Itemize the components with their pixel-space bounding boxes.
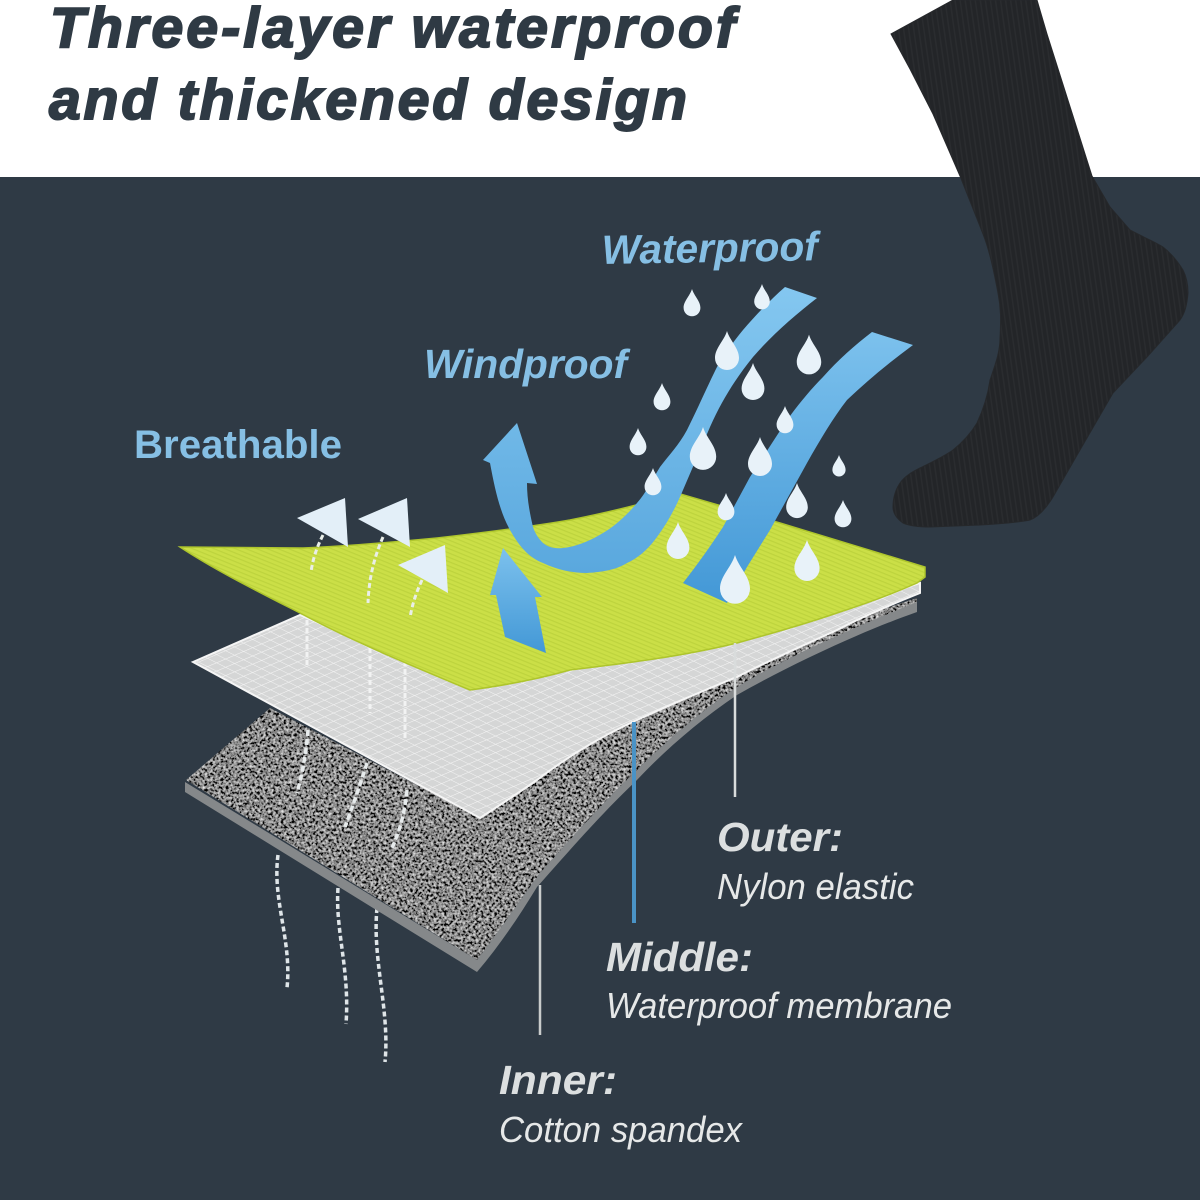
breathing dashes on inner layer bbox=[297, 730, 407, 848]
inner layer edge bbox=[185, 600, 917, 972]
middle layer bbox=[193, 583, 920, 818]
leader: outer bbox=[734, 643, 736, 797]
leader lines bbox=[540, 643, 735, 1035]
title: and thickened design bbox=[49, 68, 687, 132]
inner layer knit texture bbox=[180, 590, 925, 975]
label: breathable: Breathable bbox=[134, 423, 342, 467]
leader: middle bbox=[632, 722, 636, 923]
icon: wind and water streams bbox=[483, 287, 913, 653]
breathing dashes on middle layer bbox=[307, 620, 405, 740]
icon: black sock bbox=[891, 0, 1188, 527]
inner caption bbox=[499, 1057, 744, 1150]
breathing dashes on outer layer bbox=[311, 535, 422, 618]
middle caption: Middle: bbox=[606, 934, 753, 980]
label: waterproof: Waterproof bbox=[601, 223, 822, 273]
wind arrow ribbon bbox=[483, 287, 817, 573]
outer caption: Nylon elastic bbox=[717, 866, 914, 907]
up-down arrow bbox=[490, 548, 546, 653]
outer caption bbox=[717, 814, 914, 907]
inner layer bbox=[180, 590, 925, 975]
title bbox=[49, 0, 740, 132]
outer caption: Outer: bbox=[717, 814, 843, 860]
outer layer bbox=[180, 493, 925, 690]
icon: breathable arrows bbox=[297, 498, 448, 593]
inner caption: Cotton spandex bbox=[499, 1109, 744, 1150]
icon: water drops bbox=[630, 284, 851, 604]
water ribbon bbox=[683, 332, 913, 603]
middle caption bbox=[606, 934, 952, 1026]
breathing dashes below layers bbox=[277, 855, 386, 1062]
leader: inner bbox=[539, 885, 541, 1035]
middle caption: Waterproof membrane bbox=[606, 985, 952, 1026]
label: windproof: Windproof bbox=[424, 341, 631, 387]
inner caption: Inner: bbox=[499, 1057, 617, 1103]
